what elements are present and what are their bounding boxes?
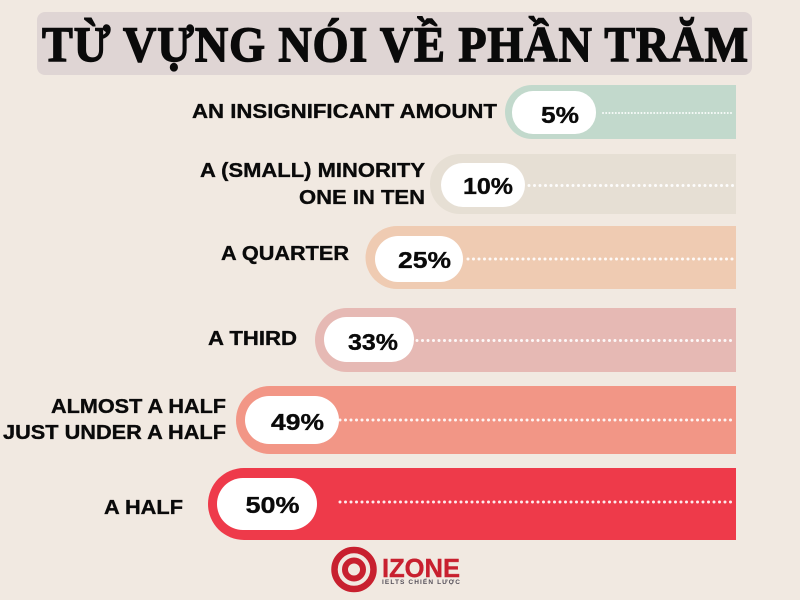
row: 25% a quarter: 25% (398, 247, 451, 273)
row: 10% a small minority: 10% (463, 173, 513, 199)
row: 49% almost a half: 49% (271, 409, 324, 435)
row: 33% a third: 33% (348, 329, 398, 355)
row: 10% a small minority (200, 154, 736, 214)
row: 25% a quarter: A QUARTER (221, 242, 349, 265)
title banner: TỪ VỰNG NÓI VỀ PHẦN TRĂM (42, 15, 749, 72)
row: 50% a half (104, 468, 736, 540)
row: 5% an insignificant amount: 5% (541, 102, 579, 128)
row: 50% a half: A HALF (104, 496, 183, 519)
logo: IZONE: IZONE (382, 553, 460, 583)
row: 10% a small minority: ONE IN TEN (299, 186, 425, 209)
row: 33% a third (208, 308, 736, 372)
row: 49% almost a half: JUST UNDER A HALF (3, 421, 226, 444)
logo: IZONE: IELTS CHIẾN LƯỢC (382, 576, 460, 586)
row: 10% a small minority: A (SMALL) MINORITY (200, 159, 425, 182)
logo: IZONE (334, 550, 460, 589)
row: 25% a quarter (221, 226, 736, 289)
row: 50% a half: 50% (246, 492, 300, 518)
row: 49% almost a half (3, 386, 736, 454)
row: 33% a third: A THIRD (208, 327, 297, 350)
row: 5% an insignificant amount (192, 85, 736, 139)
row: 5% an insignificant amount: AN INSIGNIFICANT AMOUNT (192, 100, 498, 123)
row: 49% almost a half: ALMOST A HALF (51, 395, 226, 418)
